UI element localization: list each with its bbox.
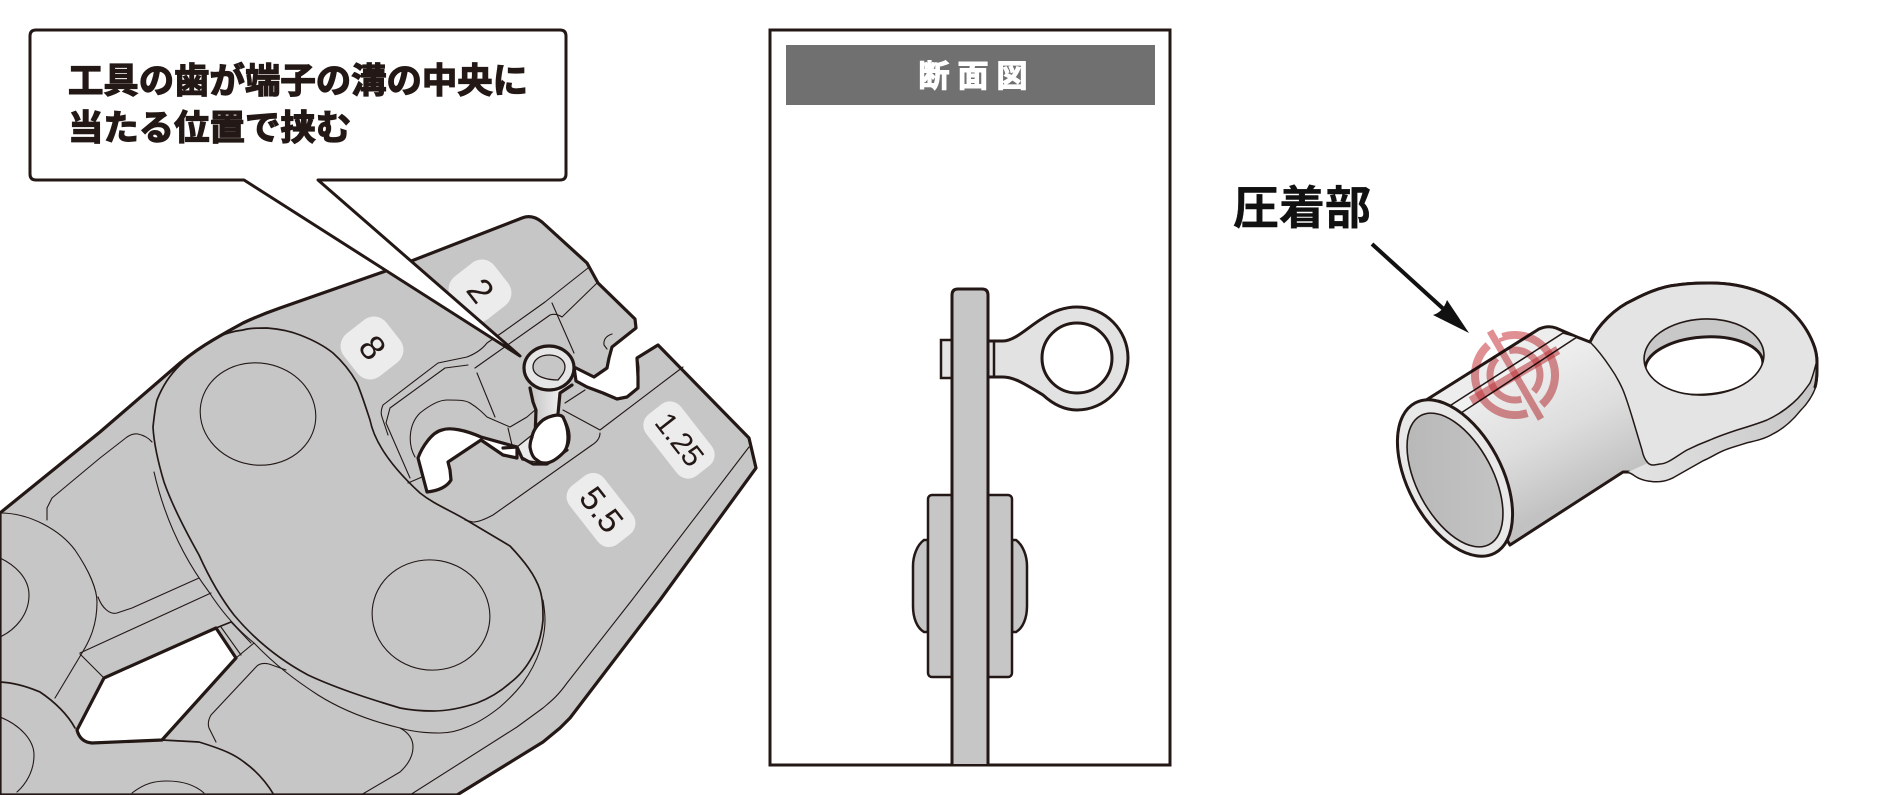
callout box and pointer — [30, 30, 566, 356]
crimping tool illustration — [0, 217, 756, 795]
ring terminal illustration — [1374, 283, 1817, 575]
handle rollers and pockets — [0, 434, 749, 795]
terminal neck — [532, 384, 572, 440]
flat tongue top face — [1590, 283, 1817, 465]
tool jaw strip — [952, 289, 988, 764]
tongue side band — [1628, 363, 1817, 481]
terminal wall line — [993, 341, 995, 377]
lower jaw details — [465, 358, 683, 522]
neck edges — [530, 385, 572, 438]
upper jaw details — [381, 268, 612, 483]
size badge 1.25: 1.25 — [648, 407, 710, 473]
handle opening — [77, 628, 236, 743]
callout text: 工具の歯が端子の溝の中央に — [68, 61, 528, 101]
crimp target mark — [1465, 325, 1565, 425]
size badge 2 — [442, 253, 518, 329]
tool silhouette — [0, 217, 756, 795]
panel: cross-section — [770, 30, 1170, 765]
side plates — [928, 495, 1012, 677]
rivet bottom — [363, 551, 499, 679]
jaw opening — [418, 429, 517, 492]
label: crimp section: 圧着部 — [1233, 182, 1371, 234]
size badge 5.5 — [561, 467, 641, 553]
barrel seam — [1448, 333, 1577, 415]
hole outline — [1642, 316, 1766, 398]
barrel bore — [1387, 398, 1523, 562]
tongue hole — [1644, 320, 1764, 394]
terminal body — [1423, 283, 1817, 545]
section of ring terminal — [988, 307, 1128, 410]
size badge 2: 2 — [459, 271, 501, 311]
link plate with rivets — [153, 328, 545, 733]
size badge 8: 8 — [351, 328, 393, 368]
outer ring edge — [1590, 283, 1817, 387]
terminal sleeve — [517, 435, 537, 462]
size badge 8 — [334, 310, 410, 386]
terminal barrel — [530, 415, 568, 463]
terminal ring — [524, 346, 574, 390]
panel heading — [786, 45, 1155, 105]
callout text: 当たる位置で挟む — [68, 108, 351, 148]
section of terminal tab left — [941, 340, 952, 378]
rivet top — [192, 354, 324, 474]
callout — [30, 30, 566, 356]
barrel underside line — [503, 447, 567, 464]
rivet head right — [1012, 540, 1027, 632]
ring terminal in jaw — [503, 346, 574, 464]
panel frame — [770, 30, 1170, 765]
barrel side line — [563, 416, 570, 447]
barrel mouth — [1374, 381, 1536, 575]
rivet head left — [913, 540, 928, 632]
panel heading: 断面図 — [918, 59, 1036, 94]
arrow — [1372, 244, 1469, 333]
size badge 1.25 — [638, 396, 720, 484]
size badge 5.5: 5.5 — [571, 480, 631, 540]
terminal hole — [533, 355, 565, 380]
